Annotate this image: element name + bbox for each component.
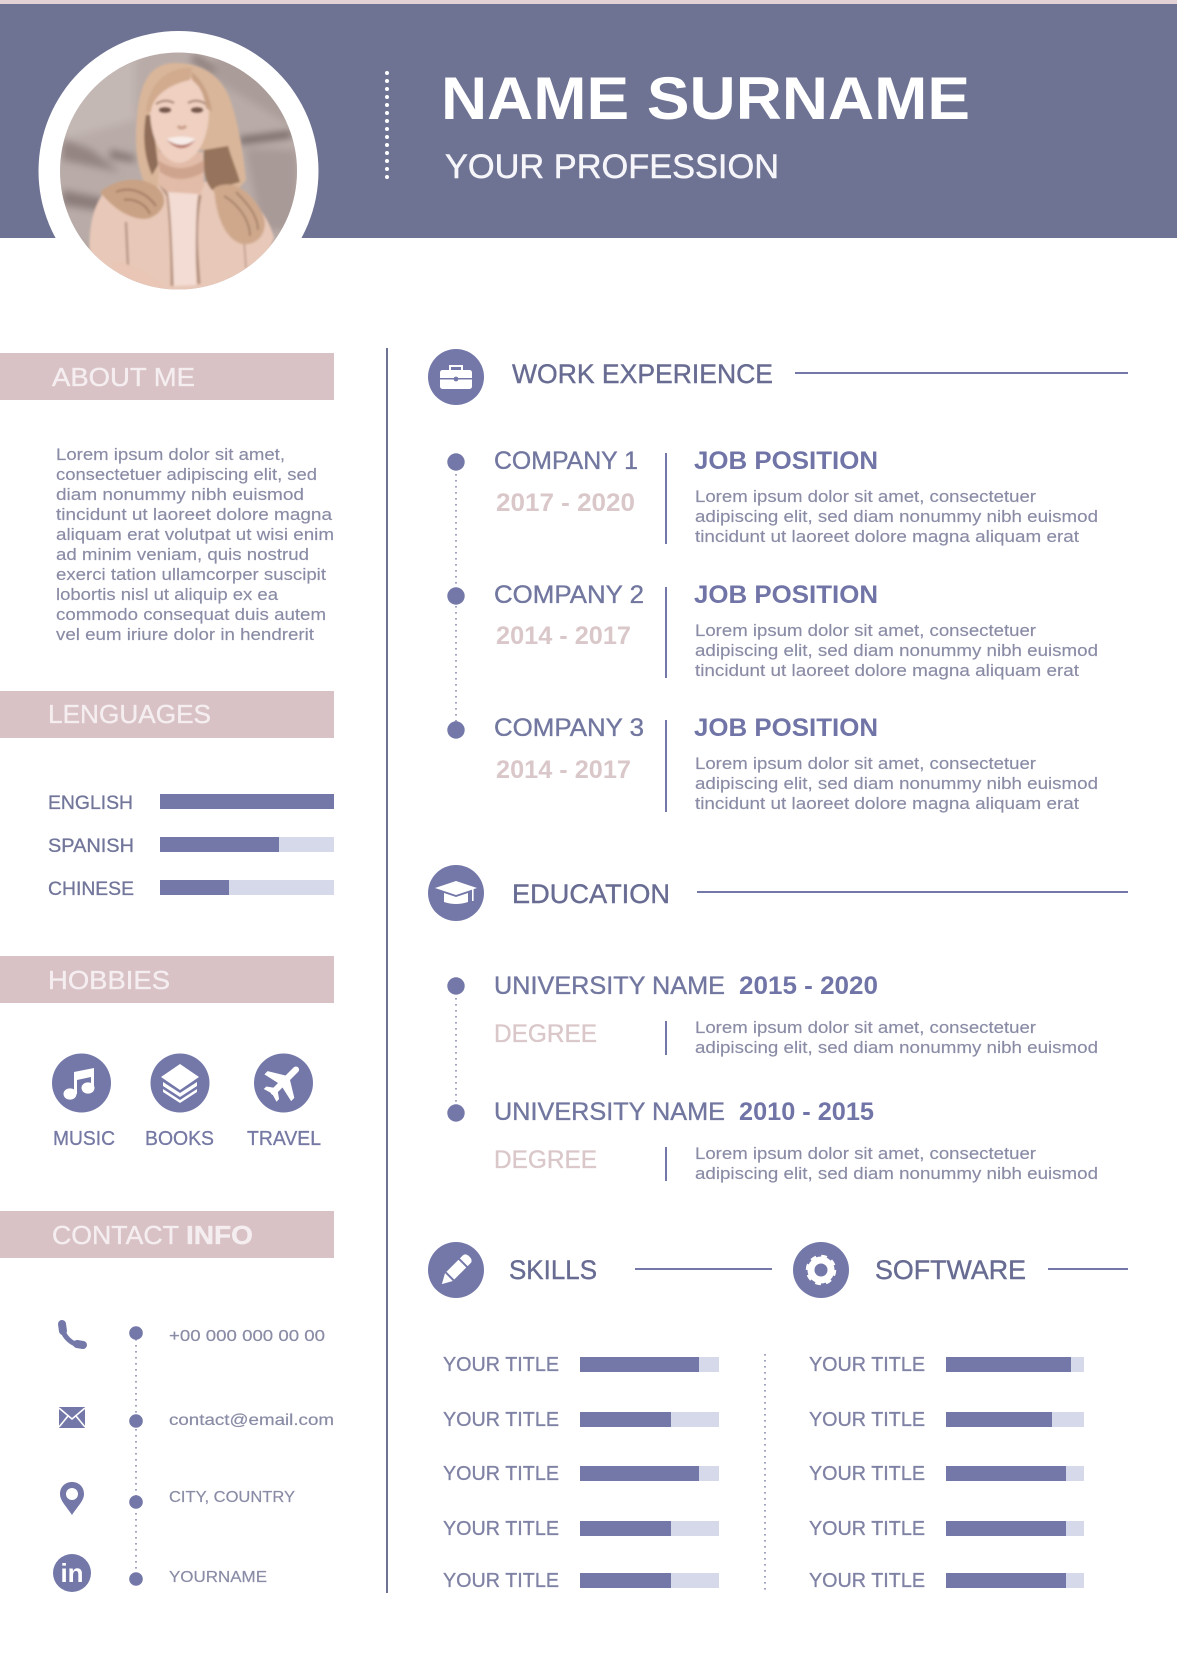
about me heading: ABOUT ME (52, 362, 195, 392)
profile photo (38, 31, 318, 311)
languages bars (48, 793, 334, 900)
dotted skills separator (764, 1354, 766, 1591)
job entry 1 (494, 447, 1098, 546)
job entry 2: Lorem ipsum dolor sit amet, consectetuer (695, 622, 1037, 640)
education entry 2 (494, 1098, 1098, 1183)
skills bars (443, 1354, 719, 1592)
education entry 1: adipiscing elit, sed diam nonummy nibh euismod (695, 1039, 1098, 1057)
icon: travel (254, 1054, 313, 1112)
job entry 2: JOB POSITION (694, 581, 878, 609)
education entry 2: UNIVERSITY NAME (494, 1098, 725, 1126)
linkedin name: YOURNAME (169, 1569, 267, 1586)
education entry 1: Lorem ipsum dolor sit amet, consectetuer (695, 1019, 1037, 1037)
label: books: BOOKS (145, 1128, 214, 1150)
job entry 3: adipiscing elit, sed diam nonummy nibh euismod (695, 775, 1098, 793)
contact info heading: CONTACT (52, 1220, 179, 1250)
label: travel: TRAVEL (247, 1128, 321, 1150)
eyes and mouth (156, 101, 206, 148)
icon: linkedin: in (60, 1558, 84, 1588)
job entry 1: Lorem ipsum dolor sit amet, consectetuer (695, 488, 1037, 506)
dotted header separator (385, 71, 389, 179)
education entry 2: adipiscing elit, sed diam nonummy nibh euismod (695, 1165, 1098, 1183)
job entry 3 (494, 714, 1098, 813)
job entry 2: adipiscing elit, sed diam nonummy nibh euismod (695, 642, 1098, 660)
software bars (809, 1354, 1084, 1592)
face (150, 76, 209, 163)
job entry 1: 2017 - 2020 (496, 489, 635, 517)
job entry 3: JOB POSITION (694, 714, 878, 742)
icon: phone (62, 1324, 83, 1345)
hand (126, 264, 130, 269)
contact timeline (129, 1326, 143, 1586)
hobbies heading: HOBBIES (48, 965, 170, 995)
languages bars: CHINESE (48, 879, 134, 900)
education entry 1: UNIVERSITY NAME (494, 972, 725, 1000)
software bars: YOUR TITLE (809, 1570, 925, 1592)
hobbies heading (0, 956, 334, 1003)
column divider (386, 348, 388, 1593)
about me text: consectetuer adipiscing elit, sed (56, 466, 317, 484)
skills bars: YOUR TITLE (443, 1354, 559, 1376)
software bars: YOUR TITLE (809, 1409, 925, 1431)
job entry 2: COMPANY 2 (494, 581, 644, 609)
about me text: exerci tation ullamcorper suscipit (56, 566, 326, 584)
job entry 1: tincidunt ut laoreet dolore magna aliquam erat (695, 528, 1079, 546)
about me text: tincidunt ut laoreet dolore magna (56, 506, 333, 524)
right curls (214, 184, 265, 244)
icon: graduation cap (428, 865, 484, 921)
left curls (100, 180, 164, 219)
education heading: EDUCATION (512, 879, 670, 909)
about me text: aliquam erat volutpat ut wisi enim (56, 526, 334, 544)
software heading: SOFTWARE (875, 1255, 1026, 1285)
hair mass (136, 63, 246, 196)
about me text: commodo consequat duis autem (56, 606, 326, 624)
skills bars: YOUR TITLE (443, 1463, 559, 1485)
profession subtitle: YOUR PROFESSION (445, 148, 779, 186)
icon: location pin (60, 1482, 84, 1515)
skills bars: YOUR TITLE (443, 1518, 559, 1540)
about me text (56, 446, 334, 644)
icon: email (59, 1407, 85, 1428)
job entry 3: Lorem ipsum dolor sit amet, consectetuer (695, 755, 1037, 773)
job entry 1: JOB POSITION (694, 447, 878, 475)
icon: linkedin (53, 1554, 91, 1592)
job entry 2: tincidunt ut laoreet dolore magna aliquam erat (695, 662, 1079, 680)
icon: briefcase (428, 349, 484, 405)
icon: music (52, 1054, 111, 1112)
education entry 2: DEGREE (494, 1146, 597, 1174)
work experience heading: WORK EXPERIENCE (512, 359, 773, 389)
contact info heading (0, 1211, 334, 1258)
icon: pencil (428, 1242, 484, 1298)
languages heading: LENGUAGES (48, 699, 211, 729)
about me text: Lorem ipsum dolor sit amet, (56, 446, 285, 464)
job entry 2: 2014 - 2017 (496, 622, 631, 650)
job entry 3: tincidunt ut laoreet dolore magna aliquam erat (695, 795, 1079, 813)
name title: NAME SURNAME (441, 65, 970, 132)
neck (158, 152, 204, 194)
about me text: ad minim veniam, quis nostrud (56, 546, 309, 564)
icon: books (150, 1054, 210, 1112)
software bars: YOUR TITLE (809, 1518, 925, 1540)
education timeline (447, 977, 465, 1122)
about me text: diam nonummy nibh euismod (56, 486, 304, 504)
languages heading (0, 691, 334, 738)
languages bars: ENGLISH (48, 793, 133, 814)
education entry 1: DEGREE (494, 1020, 597, 1048)
skills bars: YOUR TITLE (443, 1409, 559, 1431)
skills heading: SKILLS (509, 1255, 597, 1285)
phone number: +00 000 000 00 00 (169, 1328, 325, 1345)
about me text: vel eum iriure dolor in hendrerit (56, 626, 314, 644)
job entry 1: COMPANY 1 (494, 447, 638, 475)
work timeline (447, 453, 465, 739)
about me text: lobortis nisl ut aliquip ex ea (56, 586, 279, 604)
education entry 1: 2015 - 2020 (739, 972, 878, 1000)
job entry 3: 2014 - 2017 (496, 756, 631, 784)
icon: gear (793, 1242, 849, 1298)
job entry 3: COMPANY 3 (494, 714, 644, 742)
city country: CITY, COUNTRY (169, 1489, 295, 1506)
software bars: YOUR TITLE (809, 1463, 925, 1485)
about me heading (0, 353, 334, 400)
education entry 1 (494, 972, 1098, 1057)
job entry 2 (494, 581, 1098, 680)
dark hair shadow (204, 146, 240, 190)
education entry 2: 2010 - 2015 (739, 1098, 874, 1126)
shirt (168, 192, 198, 286)
jacket (90, 182, 274, 292)
label: music: MUSIC (53, 1128, 115, 1150)
header banner (0, 0, 1177, 238)
email address: contact@email.com (169, 1412, 334, 1429)
education entry 2: Lorem ipsum dolor sit amet, consectetuer (695, 1145, 1037, 1163)
job entry 1: adipiscing elit, sed diam nonummy nibh euismod (695, 508, 1098, 526)
skills bars: YOUR TITLE (443, 1570, 559, 1592)
languages bars: SPANISH (48, 836, 134, 857)
software bars: YOUR TITLE (809, 1354, 925, 1376)
contact info heading: INFO (186, 1220, 253, 1250)
